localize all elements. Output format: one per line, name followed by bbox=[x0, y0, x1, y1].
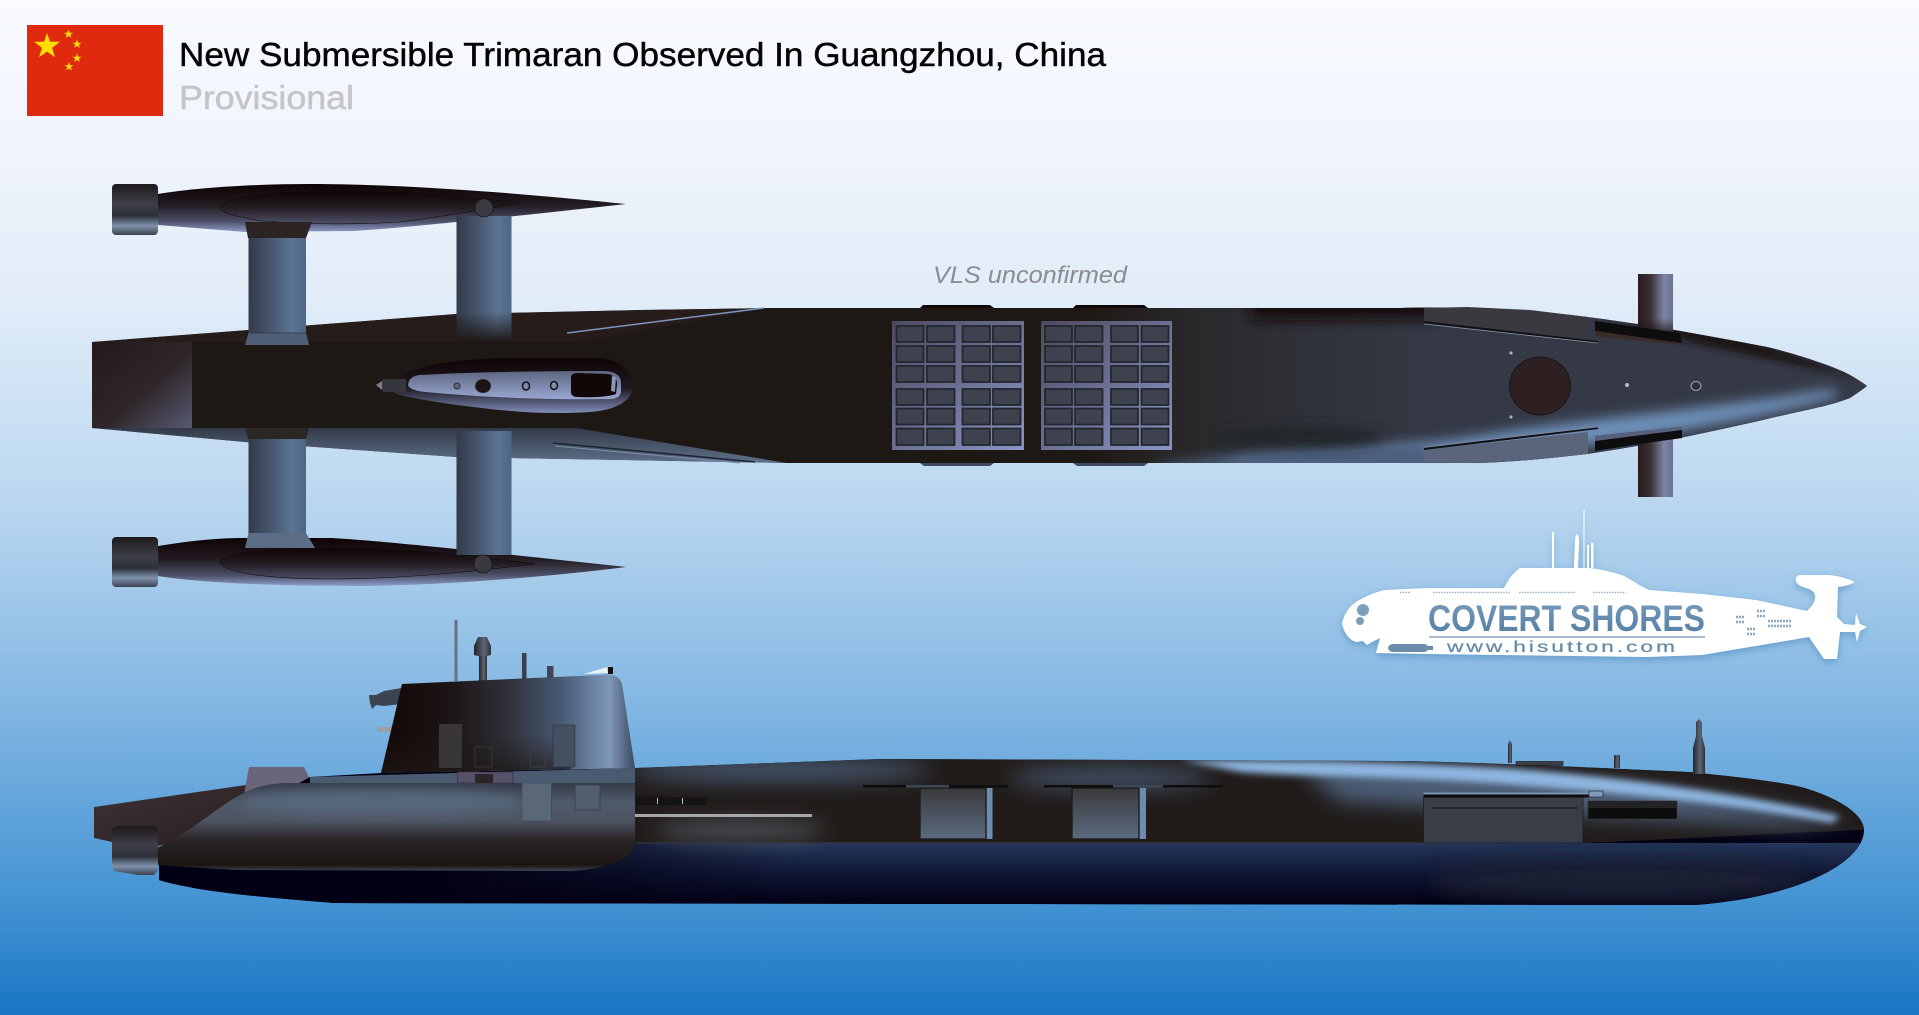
dorsal fin bbox=[244, 767, 312, 795]
logo name: COVERT SHORES bbox=[1428, 597, 1705, 639]
dashes above hatches bbox=[863, 785, 1223, 788]
logo details bbox=[1356, 592, 1792, 652]
hull bumps bbox=[920, 305, 1148, 466]
forward upper strut bbox=[456, 199, 512, 342]
title: New Submersible Trimaran Observed In Guangzhou, China bbox=[179, 36, 1107, 73]
masts on sail bbox=[454, 620, 613, 682]
hull side bbox=[150, 758, 1880, 907]
bow planes bbox=[1638, 274, 1673, 497]
deck fitting bbox=[458, 772, 513, 783]
forward masts bbox=[1508, 719, 1705, 774]
logo url: www.hisutton.com bbox=[1446, 639, 1678, 656]
small fittings bbox=[1509, 351, 1701, 419]
lower outrigger hull bbox=[112, 537, 626, 587]
main hull bbox=[92, 298, 1880, 470]
subtitle: Provisional bbox=[179, 79, 354, 116]
aft lower strut bbox=[245, 428, 315, 548]
side view of trimaran bbox=[94, 620, 1880, 907]
hull slit lines bbox=[553, 308, 764, 463]
struts bbox=[245, 199, 512, 573]
bow panel bbox=[1424, 791, 1677, 843]
VLS panel left bbox=[892, 321, 1024, 450]
top view of trimaran bbox=[92, 184, 1880, 587]
sail seen from above bbox=[376, 358, 633, 413]
header bbox=[27, 25, 1107, 116]
bow plane recesses bbox=[1595, 321, 1682, 343]
VLS panel right bbox=[1041, 321, 1172, 450]
upper outrigger hull bbox=[112, 184, 626, 235]
upper nacelle bbox=[112, 184, 158, 235]
logo submarine silhouette bbox=[1342, 510, 1867, 659]
forward hatches bbox=[920, 788, 1146, 839]
aft side fittings bbox=[635, 797, 812, 817]
bow details top view bbox=[1424, 274, 1701, 497]
upper flank panel bbox=[1424, 307, 1588, 338]
tail fin bbox=[94, 785, 260, 846]
side nacelle bbox=[112, 826, 158, 875]
sail bbox=[381, 674, 635, 775]
aft upper strut bbox=[245, 222, 312, 345]
side sponson bbox=[157, 783, 635, 871]
VLS label: VLS unconfirmed bbox=[933, 262, 1128, 289]
forward lower strut bbox=[456, 431, 512, 573]
snorkel on sail bbox=[369, 688, 402, 732]
hatch circle bbox=[1510, 357, 1570, 415]
aft deck section bbox=[92, 342, 192, 428]
logo: Covert Shores bbox=[1342, 510, 1867, 659]
lower nacelle bbox=[112, 537, 158, 587]
lower flank panel bbox=[1424, 432, 1588, 463]
icon: flag of China bbox=[27, 25, 163, 116]
